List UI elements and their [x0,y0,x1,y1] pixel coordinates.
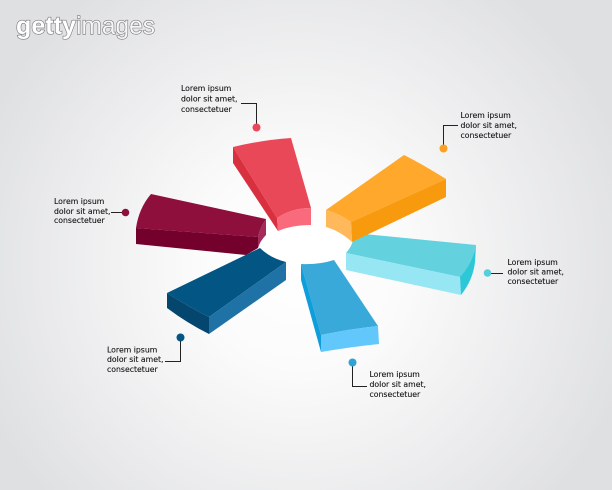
callout: red: Lorem ipsum [181,84,231,93]
callout: blue: consectetuer [370,390,421,399]
callout: cyan: dolor sit amet, [508,268,564,276]
callout: red: dolor sit amet, [181,94,237,104]
callout: orange: dolor sit amet, [460,121,517,130]
callout: blue: dolor sit amet, [370,380,426,389]
callout: cyan [484,258,564,286]
callout: orange [440,111,517,152]
callout: navy: consectetuer [107,365,159,374]
segment: orange [326,155,446,242]
segment: navy [167,248,286,334]
segment: blue [301,260,379,352]
callout: orange: consectetuer [460,131,512,140]
callout: red: consectetuer [181,105,233,114]
segment: cyan [346,233,476,295]
callout: orange: Lorem ipsum [460,111,511,120]
callout: maroon: dolor sit amet, [54,207,110,216]
segment: red [233,138,311,231]
callout: blue: Lorem ipsum [370,370,420,379]
callout: navy [107,334,184,374]
callout: maroon [54,197,129,225]
callout: cyan: consectetuer [508,277,559,286]
segment: maroon [136,194,266,255]
callout: blue [348,358,426,399]
callout: cyan: Lorem ipsum [508,258,558,267]
callout: navy: Lorem ipsum [107,346,157,354]
callout: red [181,84,260,132]
callout: maroon: consectetuer [54,216,106,225]
watermark logo: getty [16,12,76,40]
callout: navy: dolor sit amet, [107,355,163,364]
watermark logo [16,12,155,40]
callout: maroon: Lorem ipsum [54,197,104,206]
watermark logo: images [76,12,155,40]
center white disc [255,222,351,274]
